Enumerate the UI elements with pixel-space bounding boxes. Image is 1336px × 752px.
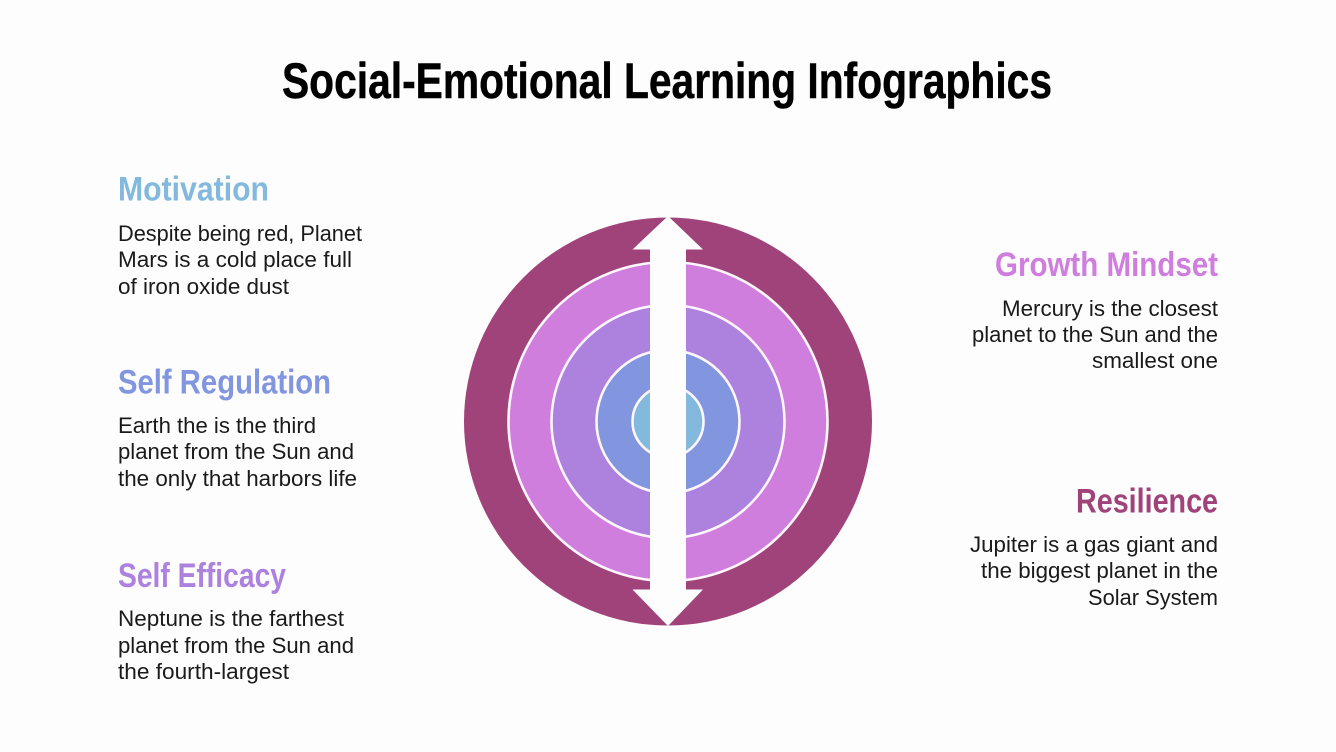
text block: motivation: Mars is a cold place full (118, 247, 352, 272)
ring: self regulation (596, 350, 740, 493)
text block: growth mindset: Mercury is the closest (1002, 296, 1218, 321)
text block: self regulation: Earth the is the third (118, 413, 316, 438)
heading: motivation: Motivation (118, 170, 269, 208)
arrow: double-headed vertical (632, 216, 703, 626)
text block: resilience: Jupiter is a gas giant and (970, 532, 1218, 557)
text block: resilience: Solar System (1088, 585, 1218, 610)
text block: resilience: the biggest planet in the (981, 558, 1218, 583)
ring: resilience (464, 218, 872, 626)
panel: motivation (118, 170, 362, 299)
panel: resilience (970, 482, 1218, 610)
text block: growth mindset (972, 296, 1218, 373)
text block: self regulation: planet from the Sun and (118, 439, 354, 464)
panel: self regulation (118, 364, 357, 491)
text block: growth mindset: smallest one (1092, 348, 1218, 373)
heading: self efficacy: Self Efficacy (118, 557, 286, 595)
ring: growth mindset (508, 262, 828, 581)
text block: motivation: Despite being red, Planet (118, 221, 362, 246)
heading: self regulation: Self Regulation (118, 364, 331, 402)
text block: self efficacy: planet from the Sun and (118, 633, 354, 658)
text block: motivation (118, 221, 362, 299)
panel: self efficacy (118, 557, 354, 684)
text block: growth mindset: planet to the Sun and the (972, 322, 1218, 347)
text block: self efficacy: the fourth-largest (118, 659, 289, 684)
panel: growth mindset (972, 246, 1218, 373)
heading: resilience: Resilience (1076, 482, 1218, 520)
title: Social-Emotional Learning Infographics (282, 53, 1052, 109)
text block: self efficacy: Neptune is the farthest (118, 606, 344, 631)
ring: self efficacy (552, 305, 784, 538)
text block: self regulation (118, 413, 357, 491)
text block: resilience (970, 532, 1218, 610)
ring: motivation (632, 386, 704, 457)
text block: self regulation: the only that harbors life (118, 466, 357, 491)
text block: motivation: of iron oxide dust (118, 274, 289, 299)
heading: growth mindset: Growth Mindset (995, 246, 1218, 284)
chart: concentric circles (464, 216, 872, 626)
text block: self efficacy (118, 606, 354, 684)
